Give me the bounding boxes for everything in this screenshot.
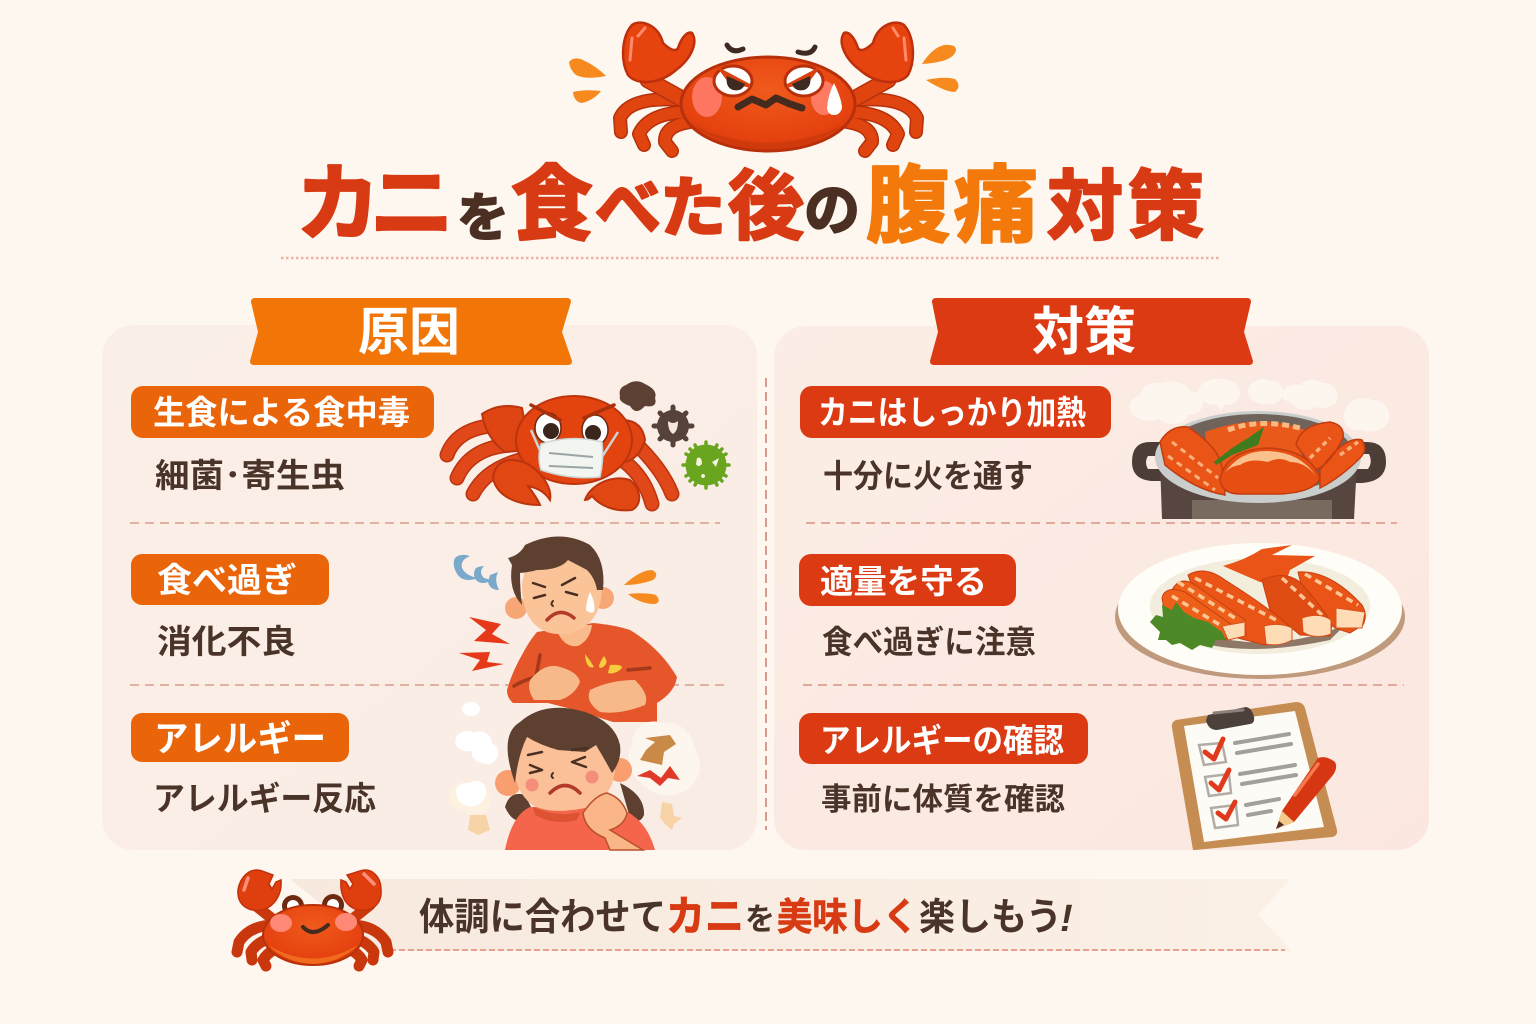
tag: allergy: アレルギー [154,718,326,759]
text: enjoy crab according to your condition: を [745,902,775,937]
tag: confirm allergy [799,713,1088,764]
text: enjoy crab according to your condition: 体調に合わせて [419,897,666,939]
text: enjoy crab according to your condition: カニ [666,893,744,940]
text: indigestion: 消化不良 [157,623,296,660]
tag: food poisoning [131,386,434,438]
text: enjoy crab according to your condition: 楽しもう [919,897,1062,939]
title: べ [595,171,661,245]
heading ribbon: countermeasures [930,298,1253,365]
tag: heat crab [800,386,1111,438]
heading ribbon: causes: 原因 [358,304,460,362]
icon: masked crab with germs [447,381,729,510]
panel: causes [102,298,757,850]
title [296,157,1204,253]
tag: heat crab: カニはしっかり加熱 [818,394,1086,431]
tag: overeating: 食べ過ぎ [157,562,297,600]
splash marks [569,45,958,103]
title: 腹 [866,159,950,253]
tag: food poisoning: 生食による食中毒 [153,394,410,431]
text: check constitution: 事前に体質を確認 [821,782,1065,817]
text: enjoy crab according to your condition [419,893,1073,940]
divider: vertical [765,378,767,830]
icon: worried crab at top [569,23,958,151]
text: watch overeating: 食べ過ぎに注意 [822,624,1036,660]
text: enjoy crab according to your condition: ! [1060,898,1073,940]
title: 痛 [954,159,1038,253]
text: cook thoroughly: 十分に火を通す [823,458,1033,494]
text: enjoy crab according to your condition: 美味しく [777,897,918,939]
title: カ [296,157,380,251]
icon: plate of crab legs [1115,543,1405,679]
title: 対 [1047,165,1123,250]
title: た [660,171,726,245]
tag: keep moderate amount [799,554,1016,606]
title: ニ [370,157,454,251]
tag: confirm allergy: アレルギーの確認 [820,722,1064,759]
title: 食 [511,160,593,251]
icon: clipboard checklist and pencil [1172,702,1337,850]
tag: allergy [131,713,349,762]
icon: girl with allergic reaction [448,702,700,850]
heading ribbon: causes [250,298,572,365]
title: 後 [728,165,804,250]
title: を [457,190,509,248]
tag: overeating [131,554,329,605]
panel: countermeasures [774,298,1429,850]
heading ribbon: countermeasures: 対策 [1032,304,1136,362]
icon: happy crab [237,870,388,966]
tag: keep moderate amount: 適量を守る [820,563,987,600]
title: の [804,179,860,242]
icon: boy with stomach ache [454,536,677,722]
text: bacteria: 細菌･寄生虫 [155,457,345,494]
banner: closing message [237,870,1292,966]
icon: crab in steaming pot [1129,379,1389,519]
text: allergic reaction: アレルギー反応 [153,780,376,817]
title: 策 [1128,165,1204,250]
